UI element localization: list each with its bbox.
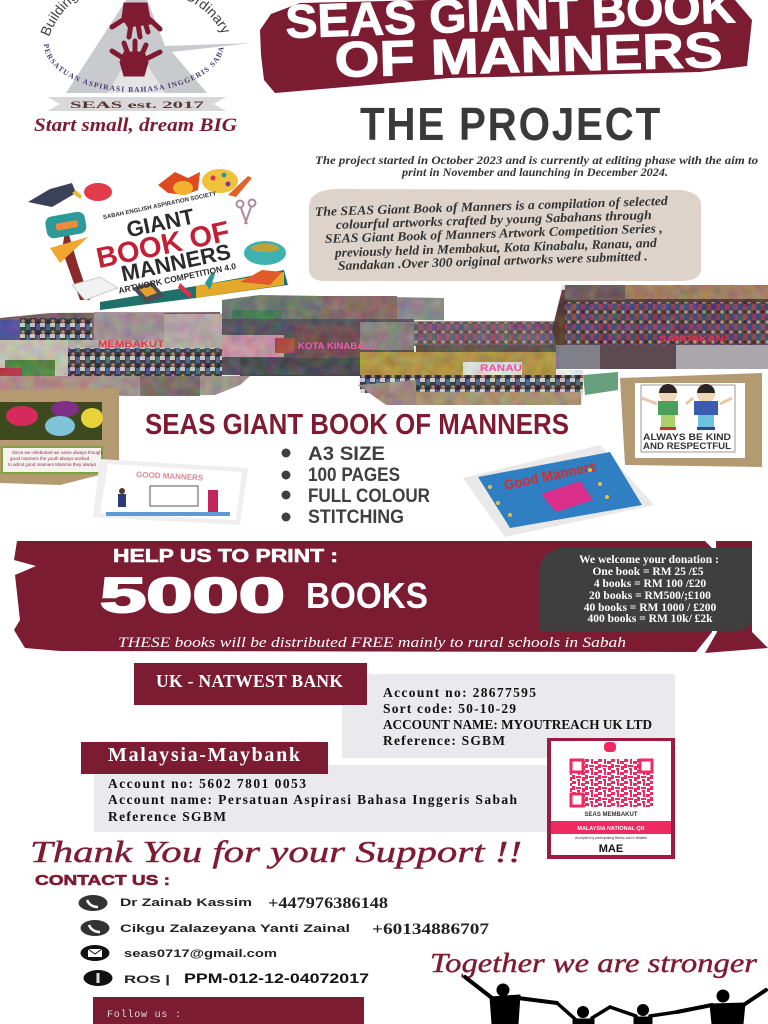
photo: membakut group <box>0 340 222 376</box>
title line 2: OF MANNERS <box>334 22 723 88</box>
kraft card: flowers <box>0 388 119 485</box>
description text: previously held in Membakut, Kota Kinabalu, Ranau, and <box>334 235 657 260</box>
silhouette: people holding hands <box>465 977 766 1024</box>
icon: leaves and pencil <box>178 270 282 298</box>
description text: colourful artworks crafted by young Sabahans through <box>336 207 652 232</box>
logo <box>40 0 251 111</box>
contact: Zalazeyana: +60134886707 <box>372 921 489 938</box>
kraft card: flowers: Since we celebrated we came always thought <box>12 450 104 455</box>
panel: UK bank details: Reference: SGBM <box>383 733 505 748</box>
photo: ranau hall <box>358 345 583 405</box>
tagline: together we are stronger: Together we are stronger <box>430 948 758 978</box>
panel: donation tiers: One book = RM 25 /£5 <box>592 566 704 578</box>
icon: flowers <box>6 401 103 436</box>
heading: seas giant book of manners: SEAS GIANT BOOK OF MANNERS <box>145 409 569 441</box>
kraft card: flowers: good manners the youth always worked <box>10 456 90 461</box>
QR card <box>547 738 675 859</box>
panel: UK bank details: Account no: 28677595 <box>383 685 536 700</box>
icon: globe <box>244 241 286 265</box>
tagline: Start small, dream BIG <box>34 115 237 136</box>
photo: sandakan <box>552 285 768 345</box>
distribution note: THESE books will be distributed FREE mainly to rural schools in Sabah <box>118 635 626 651</box>
icon: duitnow logo <box>604 742 616 752</box>
spec list: 100 PAGES <box>308 465 400 486</box>
number: 5000: 5000 <box>100 569 285 623</box>
figure 1 <box>465 977 557 1024</box>
poster text: SABAH ENGLISH ASPIRATION SOCIETY <box>103 191 217 221</box>
figure 3 <box>610 1004 677 1024</box>
logo: SEAS est. 2017 <box>70 100 205 110</box>
panel: Malaysia bank details: Reference SGBM <box>108 809 226 824</box>
panel: donation tiers <box>539 548 752 631</box>
panel: follow us: Follow us : <box>107 1009 182 1021</box>
icon: bell and leaves <box>158 172 200 195</box>
caption: always be kind <box>643 432 731 452</box>
photo collage <box>0 285 768 410</box>
heading: thank you: Thank You for your Support !! <box>30 834 522 869</box>
description text: Sandakan .Over 300 original artworks were submitted . <box>338 248 648 273</box>
icon: boy in green <box>642 384 693 430</box>
artwork: good manners blue card: Good Manners <box>502 458 598 493</box>
icon: set square <box>50 237 88 263</box>
icon: calculator <box>132 282 165 303</box>
label: UK bank <box>134 663 367 705</box>
contact: ROS: PPM-012-12-04072017 <box>184 970 369 986</box>
heading: help us to print: HELP US TO PRINT : <box>113 546 338 566</box>
label: Malaysia bank: Malaysia-Maybank <box>108 744 301 766</box>
photo texture <box>0 285 768 410</box>
figure 4 <box>677 990 766 1024</box>
panel: donation tiers: 20 books = RM500/;£100 <box>589 590 711 602</box>
panel: donation tiers: 40 books = RM 1000 / £200 <box>584 602 716 614</box>
label: Kota Kinabalu: KOTA KINABALU <box>298 341 377 352</box>
heading: the project: THE PROJECT <box>360 98 662 150</box>
project intro text: print in November and launching in December 2024. <box>401 167 668 179</box>
photo: kota kinabalu <box>222 319 414 376</box>
contact: email <box>80 945 277 961</box>
text card <box>2 447 102 473</box>
panel: follow us <box>93 997 364 1024</box>
logo ribbon <box>47 97 226 111</box>
panel: UK bank details: ACCOUNT NAME: MYOUTREACH UK LTD <box>383 717 652 732</box>
contact: Zalazeyana <box>80 920 489 938</box>
MAE logo: MAE <box>599 843 623 855</box>
panel: donation tiers: 400 books = RM 10k/ £2k <box>587 613 713 625</box>
contact: ROS <box>84 970 369 986</box>
kraft card: always be kind <box>620 373 762 467</box>
panel: UK bank details <box>342 674 675 758</box>
panel: donation tiers: We welcome your donation : <box>579 554 719 566</box>
caption: always be kind: ALWAYS BE KIND <box>643 432 731 443</box>
artwork: thank you card <box>93 459 248 525</box>
caption: always be kind: AND RESPECTFUL <box>643 441 731 452</box>
contact: Zainab: +447976386148 <box>268 895 388 912</box>
QR code <box>570 759 653 807</box>
icon: scissors <box>236 200 256 224</box>
description text: The SEAS Giant Book of Manners is a compilation of selected <box>315 193 668 219</box>
icon: apple <box>84 183 112 201</box>
poster text: GIANT <box>124 204 197 242</box>
panel: Malaysia bank details: Account no: 5602 7801 0053 <box>108 776 306 791</box>
spec list: A3 SIZE <box>308 444 385 465</box>
panel: UK bank details: Sort code: 50-10-29 <box>383 701 516 716</box>
project intro text: The project started in October 2023 and is currently at editing phase with the aim to <box>315 155 758 167</box>
description text: SEAS Giant Book of Manners Artwork Competition Series , <box>325 220 663 246</box>
contact: Zalazeyana: Cikgu Zalazeyana Yanti Zainal <box>120 923 350 935</box>
contact: ROS: ROS | <box>124 974 170 986</box>
photo: upper left group <box>0 312 222 340</box>
icon: graduation cap <box>28 183 82 207</box>
heading: contact us: CONTACT US : <box>35 872 170 889</box>
project intro text <box>315 155 758 179</box>
photo: banner groups <box>556 345 768 395</box>
contact: email: seas0717@gmail.com <box>124 948 277 960</box>
poster: giant book of manners <box>28 169 290 310</box>
poster text <box>88 190 238 299</box>
QR note: Accepted by participating Banks and e-Wallets <box>575 836 647 840</box>
icon: boy in blue <box>694 384 732 430</box>
photo: lower left <box>0 376 250 396</box>
icon: lower hand <box>112 41 160 76</box>
panel: Malaysia bank details <box>94 765 547 832</box>
title banner <box>260 0 752 93</box>
QR caption: SEAS MEMBAKUT <box>584 812 638 818</box>
contact: Zainab <box>78 895 388 912</box>
spec list <box>282 444 430 528</box>
icon: backpack <box>44 211 87 239</box>
QR band: MALAYSIA NATIONAL QR <box>577 826 645 832</box>
label: UK bank: UK - NATWEST BANK <box>156 671 343 691</box>
label: books: BOOKS <box>306 575 428 616</box>
description text <box>315 193 668 273</box>
donation banner <box>14 541 768 653</box>
poster text: BOOK OF <box>94 216 233 275</box>
figure 2 <box>557 1003 610 1024</box>
contact: Zainab: Dr Zainab Kassim <box>120 897 252 909</box>
icon: open book <box>72 277 118 300</box>
label: Membakut: MEMBAKUT <box>98 339 164 350</box>
poster text: MANNERS <box>119 239 233 286</box>
label: Malaysia bank <box>81 742 328 774</box>
panel: donation tiers: 4 books = RM 100 /£20 <box>594 578 706 590</box>
artwork: thank you card: GOOD MANNERS <box>136 470 204 483</box>
label: Ranau: RANAU <box>480 363 522 374</box>
poster text: ARTWORK COMPETITION 4.0 <box>117 261 237 296</box>
icon: palette <box>202 169 252 197</box>
label: Sandakan: SANDAKAN <box>659 334 724 345</box>
panel: Malaysia bank details: Account name: Persatuan Aspirasi Bahasa Inggeris Sabah <box>108 792 517 807</box>
panel: description <box>309 189 701 281</box>
artwork: good manners blue card <box>463 445 654 537</box>
spec list: FULL COLOUR <box>308 486 430 507</box>
kraft card: flowers: to admit good manners Mamma they always <box>8 462 97 467</box>
photo: standing children <box>414 321 559 346</box>
spec list: STITCHING <box>308 507 404 528</box>
icon: upper hand <box>112 3 160 37</box>
photo: top centre <box>222 295 444 320</box>
